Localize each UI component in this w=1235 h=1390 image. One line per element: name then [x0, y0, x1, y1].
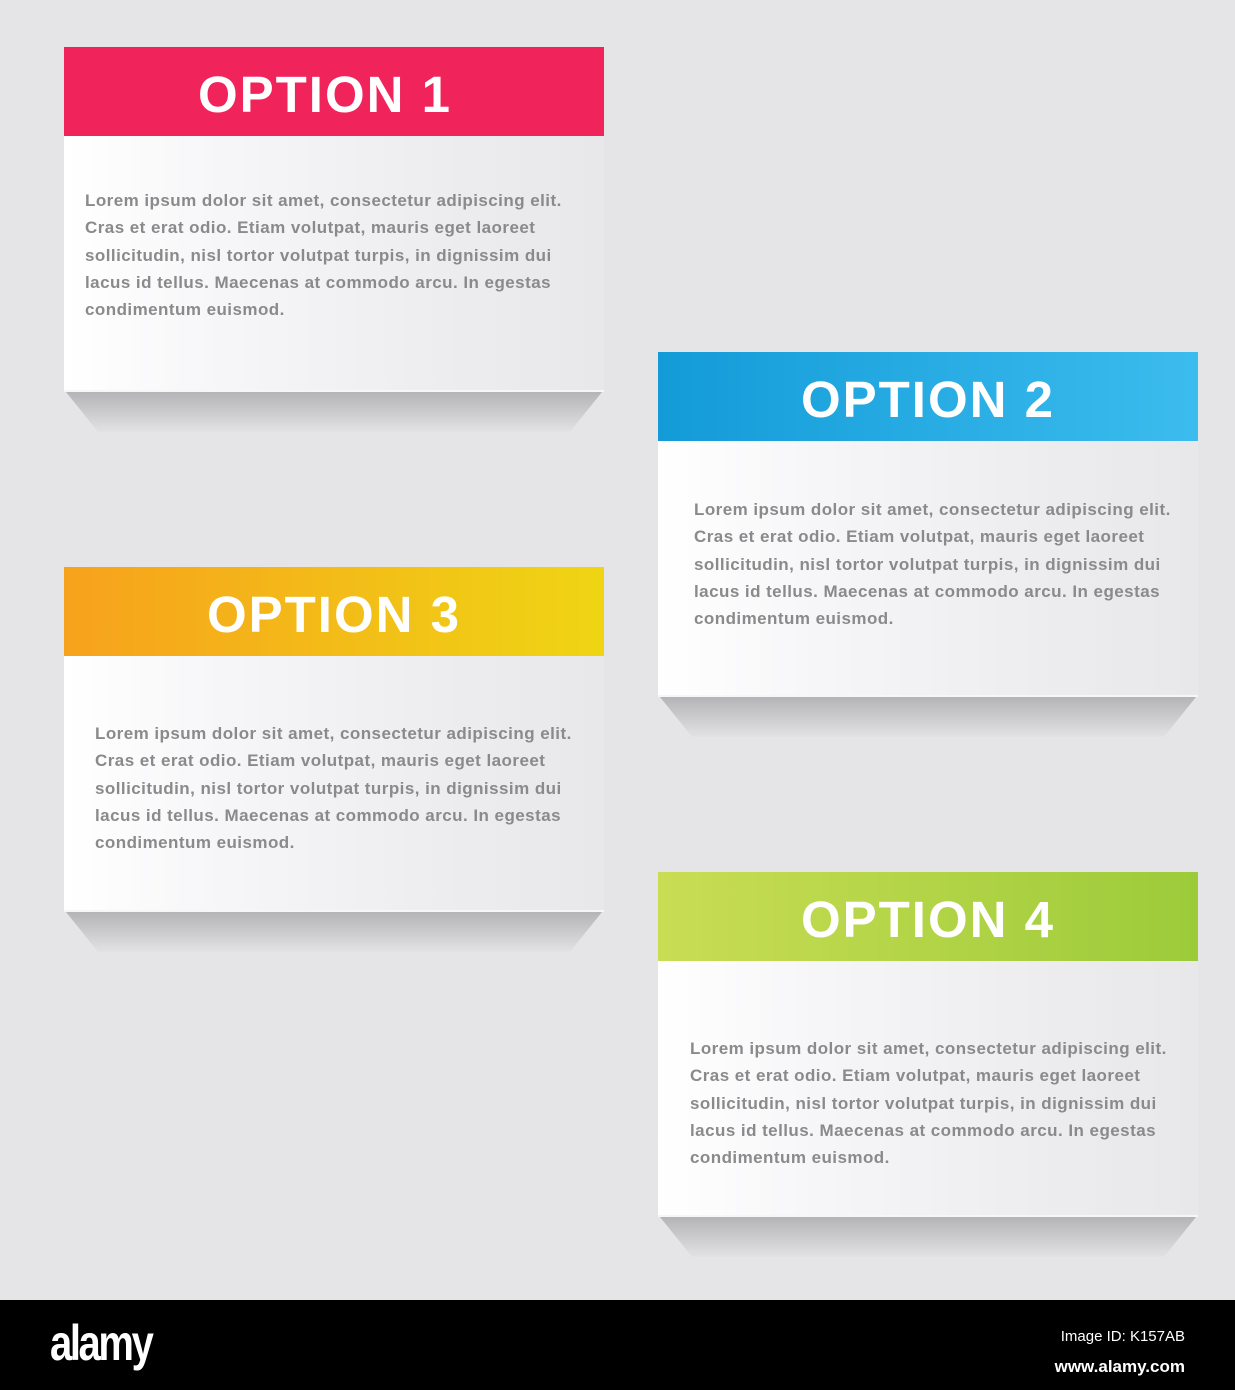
text block: lacus id tellus. Maecenas at commodo arcu. In egestas	[694, 582, 1160, 601]
text block: condimentum euismod.	[85, 300, 285, 319]
text block	[95, 724, 572, 852]
text block: sollicitudin, nisl tortor volutpat turpis, in dignissim dui	[690, 1094, 1157, 1113]
text block: lacus id tellus. Maecenas at commodo arcu. In egestas	[690, 1121, 1156, 1140]
text block	[85, 191, 562, 319]
text block: Lorem ipsum dolor sit amet, consectetur adipiscing elit.	[85, 191, 562, 210]
logo: alamy	[50, 1315, 151, 1371]
header: option 4	[658, 872, 1198, 961]
header: option 3	[64, 567, 604, 656]
text block: Cras et erat odio. Etiam volutpat, mauris eget laoreet	[85, 218, 535, 237]
body	[64, 656, 604, 912]
text block: lacus id tellus. Maecenas at commodo arcu. In egestas	[85, 273, 551, 292]
text block: lacus id tellus. Maecenas at commodo arcu. In egestas	[95, 806, 561, 825]
text block: condimentum euismod.	[690, 1148, 890, 1167]
text block: Cras et erat odio. Etiam volutpat, mauris eget laoreet	[694, 527, 1144, 546]
text block: condimentum euismod.	[694, 609, 894, 628]
text block: Lorem ipsum dolor sit amet, consectetur adipiscing elit.	[694, 500, 1171, 519]
shadow	[66, 912, 602, 948]
header: option 3: OPTION 3	[207, 586, 461, 643]
shadow	[66, 392, 602, 428]
text block	[690, 1039, 1167, 1167]
header: option 1	[64, 47, 604, 136]
body	[658, 961, 1198, 1217]
header: option 1: OPTION 1	[198, 66, 452, 123]
text block: condimentum euismod.	[95, 833, 295, 852]
text block	[694, 500, 1171, 628]
text block: Lorem ipsum dolor sit amet, consectetur adipiscing elit.	[690, 1039, 1167, 1058]
header: option 2: OPTION 2	[801, 371, 1055, 428]
card: option 3	[64, 567, 604, 948]
shadow	[660, 1217, 1196, 1252]
text block: Cras et erat odio. Etiam volutpat, mauris eget laoreet	[690, 1066, 1140, 1085]
body	[64, 136, 604, 392]
shadow	[660, 697, 1196, 732]
image id: www.alamy.com	[1055, 1357, 1185, 1376]
body	[658, 441, 1198, 697]
text block: sollicitudin, nisl tortor volutpat turpis, in dignissim dui	[85, 246, 552, 265]
text block: Lorem ipsum dolor sit amet, consectetur adipiscing elit.	[95, 724, 572, 743]
card: option 4	[658, 872, 1198, 1252]
text block: Cras et erat odio. Etiam volutpat, mauris eget laoreet	[95, 751, 545, 770]
card: option 2	[658, 352, 1198, 732]
card: option 1	[64, 47, 604, 428]
text block: sollicitudin, nisl tortor volutpat turpis, in dignissim dui	[694, 555, 1161, 574]
image id: Image ID: K157AB	[1061, 1328, 1185, 1345]
text block: sollicitudin, nisl tortor volutpat turpis, in dignissim dui	[95, 779, 562, 798]
header: option 2	[658, 352, 1198, 441]
footer bar	[0, 1300, 1235, 1390]
image id	[1054, 1328, 1185, 1376]
header: option 4: OPTION 4	[801, 891, 1055, 948]
